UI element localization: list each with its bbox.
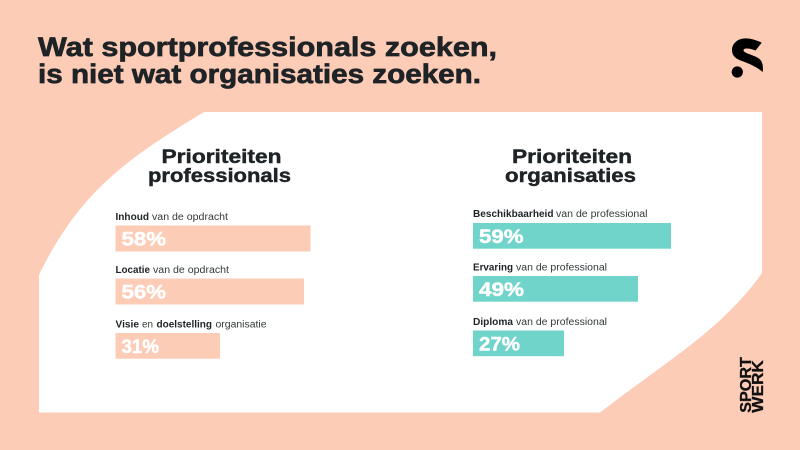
bar item: Inhoud 58%: 58%: [122, 229, 166, 251]
heading: professionals: Prioriteiten: [162, 146, 282, 168]
bar item: Visie en doelstelling 31%: doelstelling: [156, 320, 212, 331]
bar item: Ervaring 49%: [473, 263, 638, 302]
title: [38, 32, 497, 89]
bar item: Visie en doelstelling 31%: organisatie: [216, 320, 267, 331]
title: Wat sportprofessionals zoeken,: [38, 32, 497, 62]
wordmark: SPORT WERK: SPORT: [738, 357, 755, 413]
bar item: Ervaring 49%: Ervaring: [473, 263, 513, 274]
bar item: Visie en doelstelling 31%: Visie: [116, 320, 139, 331]
bar item: Ervaring 49%: van de professional: [516, 263, 607, 274]
bar item: Locatie 56%: [116, 265, 304, 304]
bar item: Diploma 27%: van de professional: [516, 317, 607, 328]
bar item: Locatie 56%: 56%: [122, 282, 166, 304]
bar item: Ervaring 49%: 49%: [479, 279, 524, 301]
wordmark: SPORT WERK: WERK: [750, 360, 767, 413]
panel: priorities organisations: [473, 146, 671, 356]
bar item: Locatie 56%: Locatie: [116, 265, 150, 276]
bar item: Visie en doelstelling 31%: [116, 320, 267, 359]
bar item: Diploma 27%: 27%: [479, 334, 520, 356]
bar item: Diploma 27%: [473, 317, 607, 356]
heading: professionals: professionals: [148, 165, 291, 187]
bar item: Inhoud 58%: [116, 212, 310, 252]
bar item: Beschikbaarheid 59%: [473, 209, 671, 249]
bar item: Beschikbaarheid 59%: van de professional: [556, 209, 648, 220]
bar item: Visie en doelstelling 31%: en: [142, 320, 153, 331]
white content panel: [39, 112, 762, 412]
heading: organisaties: [505, 146, 636, 187]
bar item: Locatie 56%: van de opdracht: [153, 265, 229, 276]
bar item: Beschikbaarheid 59%: 59%: [479, 226, 524, 248]
wordmark: SPORT WERK: [738, 357, 767, 413]
bar item: Inhoud 58%: Inhoud: [116, 212, 149, 223]
panel: priorities professionals: [116, 146, 310, 359]
title: is niet wat organisaties zoeken.: [38, 59, 481, 89]
bar item: Inhoud 58%: van de opdracht: [152, 212, 228, 223]
heading: organisaties: Prioriteiten: [512, 146, 632, 168]
heading: professionals: [148, 146, 291, 187]
bar item: Beschikbaarheid 59%: Beschikbaarheid: [473, 209, 554, 220]
icon: Sportwerk S logo: [732, 38, 763, 78]
bar item: Visie en doelstelling 31%: 31%: [122, 336, 159, 358]
heading: organisaties: organisaties: [505, 165, 636, 187]
bar item: Diploma 27%: Diploma: [473, 317, 513, 328]
